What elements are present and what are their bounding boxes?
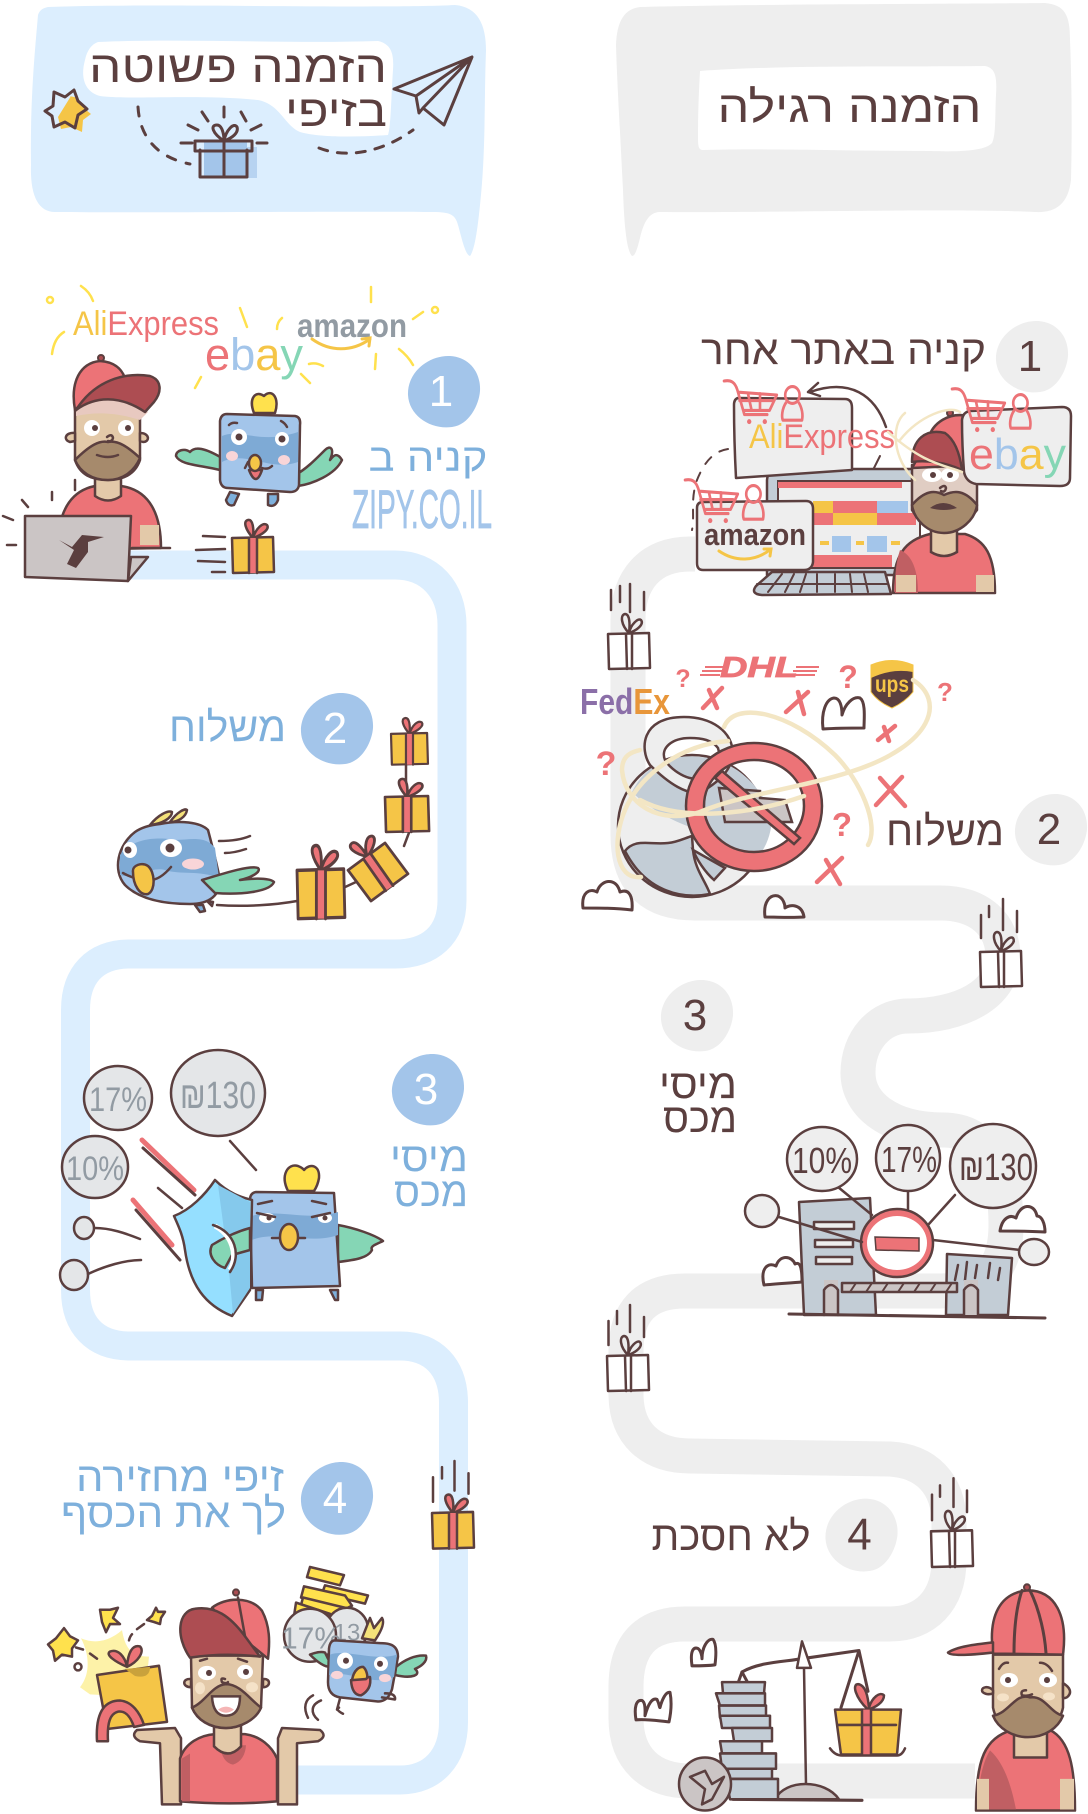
step 1 right: number badge bbox=[996, 321, 1068, 392]
open gift bbox=[97, 1646, 167, 1741]
globe with location pin bbox=[618, 717, 772, 897]
shirt bbox=[180, 1734, 277, 1803]
title: simple order with Zipy bbox=[89, 43, 387, 136]
eBay logo: ebay bbox=[205, 329, 304, 380]
gift falling 2 bbox=[980, 899, 1022, 987]
amazon card bbox=[685, 480, 813, 570]
step 1 left: number badge bbox=[408, 356, 480, 427]
step 1 right: number badge: 1 bbox=[1018, 332, 1042, 381]
crown bbox=[285, 1166, 319, 1191]
bird shielding from taxes bbox=[60, 1050, 383, 1316]
small clouds bbox=[635, 1639, 716, 1722]
buildings bbox=[799, 1198, 1012, 1315]
step 3 right: number badge: 3 bbox=[683, 991, 707, 1040]
question marks bbox=[596, 659, 953, 843]
panel: Zipy speech bubble bbox=[31, 5, 486, 256]
gift falling 1 bbox=[608, 584, 650, 669]
icon: paper plane bbox=[394, 57, 472, 125]
step 4 right: number badge bbox=[825, 1499, 898, 1571]
tax bubbles: ₪130 bbox=[959, 1147, 1033, 1189]
arrow between sites bbox=[692, 383, 886, 530]
step 4 left: label bbox=[61, 1454, 286, 1536]
AliExpress logo: AliExpress bbox=[73, 305, 219, 343]
gift falling 4 bbox=[931, 1478, 973, 1567]
icon: gift with rays bbox=[181, 107, 267, 178]
gold coin stack bbox=[294, 1567, 368, 1624]
step 1 left: number badge: 1 bbox=[429, 367, 453, 416]
step 1 left: label: ZIPY.CO.IL bbox=[352, 478, 492, 540]
tax bubbles bbox=[60, 1050, 265, 1290]
blue winding path bbox=[76, 565, 454, 1780]
keyboard bbox=[754, 572, 891, 595]
dashed flight path bbox=[138, 107, 413, 164]
gift on tray bbox=[830, 1684, 905, 1755]
eBay card bbox=[952, 389, 1071, 486]
step 3 left: number badge: 3 bbox=[414, 1065, 438, 1114]
step 4 right: number badge: 4 bbox=[847, 1510, 872, 1560]
step 2 right: label: משלוח bbox=[886, 808, 1004, 854]
step 3 left: label bbox=[390, 1134, 468, 1215]
hand-drawn clouds bbox=[583, 698, 864, 917]
question marks: ? bbox=[675, 665, 691, 693]
title: regular order: הזמנה רגילה bbox=[718, 83, 982, 132]
man sad with cap bbox=[948, 1584, 1075, 1811]
courier logos bbox=[580, 652, 913, 722]
monitor bbox=[767, 469, 920, 575]
panel: regular order speech bubble bbox=[616, 3, 1072, 256]
amazon card: amazon bbox=[704, 517, 806, 552]
body bbox=[250, 1192, 340, 1288]
happy man with open gift bbox=[48, 1589, 324, 1804]
speeding gift bbox=[196, 520, 274, 573]
courier logos: FedEx bbox=[580, 681, 670, 722]
step 3 right: label bbox=[659, 1061, 737, 1141]
tax bubbles bbox=[745, 1124, 1049, 1265]
coin bbox=[679, 1758, 731, 1811]
bird flying with wings bbox=[176, 393, 342, 506]
speed lines bbox=[219, 836, 250, 853]
no-entry sign bbox=[861, 1209, 933, 1277]
tax bubbles: 10% bbox=[66, 1150, 124, 1188]
arrows hitting shield bbox=[133, 1140, 195, 1260]
arms bbox=[134, 1728, 324, 1804]
tax bubbles: 10% bbox=[792, 1140, 852, 1181]
amazon logo: amazon bbox=[297, 307, 407, 344]
delivery route swirls bbox=[617, 680, 930, 877]
AliExpress card bbox=[724, 381, 895, 478]
coins: 17% bbox=[281, 1622, 341, 1656]
red crosses bbox=[703, 688, 905, 884]
gift train bbox=[297, 718, 429, 919]
tax bubbles: 17% bbox=[881, 1139, 937, 1180]
tax bubbles: ₪130 bbox=[180, 1075, 256, 1117]
step 4 left: number badge bbox=[301, 1462, 373, 1535]
head bbox=[191, 1656, 263, 1728]
courier logos: DHL bbox=[720, 652, 798, 684]
question marks: ? bbox=[937, 677, 953, 707]
step 2 right: number badge: 2 bbox=[1037, 805, 1061, 854]
step 3 left: number badge bbox=[392, 1054, 464, 1125]
illustration: customs checkpoint bbox=[745, 1124, 1049, 1318]
motion lines bbox=[88, 1141, 256, 1274]
step 4 left: label: זיפי מחזירה bbox=[76, 1454, 284, 1500]
man looking confused bbox=[893, 410, 995, 593]
step 4 right: label: לא חסכת bbox=[652, 1513, 810, 1559]
title background bbox=[698, 66, 996, 151]
illustration: balance scale with coins and gift bbox=[635, 1639, 905, 1811]
grey winding path bbox=[626, 554, 1006, 1781]
scale stand bbox=[733, 1641, 868, 1800]
yellow sparkles bbox=[47, 286, 438, 388]
courier logos: ups bbox=[875, 671, 909, 697]
step 2 left: number badge: 2 bbox=[323, 704, 347, 753]
shield bbox=[174, 1180, 252, 1316]
question marks: ? bbox=[596, 745, 616, 783]
icon: star bbox=[45, 90, 91, 132]
clouds bbox=[763, 1206, 1045, 1285]
laptop bbox=[25, 516, 170, 581]
step 3 left: label: מיסי bbox=[390, 1134, 468, 1180]
question marks: ? bbox=[832, 806, 852, 843]
step 2 right: number badge bbox=[1015, 794, 1087, 865]
tax bubbles: 17% bbox=[89, 1081, 147, 1119]
burst of light bbox=[80, 1630, 149, 1697]
step 3 right: label: מיסי bbox=[659, 1061, 737, 1107]
title: simple order with Zipy: בזיפי bbox=[285, 87, 387, 136]
step 1 left: label: קניה ב bbox=[368, 437, 488, 480]
happy bird bbox=[305, 1618, 426, 1720]
step 2 left: label: משלוח bbox=[169, 704, 286, 750]
wing behind bbox=[338, 1225, 383, 1262]
gift falling 3 bbox=[607, 1305, 649, 1391]
step 3 left: label: מכס bbox=[394, 1169, 468, 1215]
step 1 right: label: קניה באתר אחר bbox=[701, 327, 986, 373]
eBay card: ebay bbox=[969, 430, 1066, 479]
question marks: ? bbox=[838, 659, 858, 695]
coin stack bbox=[716, 1682, 778, 1799]
illustration: shopping on many sites bbox=[685, 381, 1071, 595]
barrier bbox=[842, 1283, 957, 1292]
step 3 right: number badge bbox=[661, 980, 733, 1051]
typing motion lines bbox=[3, 480, 75, 545]
connecting string bbox=[217, 765, 410, 906]
step 3 right: label: מכס bbox=[663, 1095, 737, 1141]
step 4 left: label: לך את הכסף bbox=[61, 1490, 286, 1536]
bird pulling gifts bbox=[118, 718, 429, 919]
cap bbox=[212, 1600, 269, 1659]
bird body bbox=[118, 810, 274, 912]
no-entry sign bbox=[686, 743, 822, 871]
gift falling left bbox=[432, 1461, 474, 1549]
stars bbox=[48, 1608, 165, 1661]
ground line bbox=[789, 1314, 1045, 1318]
step 1 left: label bbox=[352, 437, 492, 540]
step 4 left: number badge: 4 bbox=[323, 1474, 347, 1523]
title: simple order with Zipy: הזמנה פשוטה bbox=[89, 43, 387, 92]
coins and happy bird bbox=[281, 1567, 426, 1720]
truck bbox=[719, 788, 792, 822]
man with laptop bbox=[3, 355, 170, 581]
coins bbox=[281, 1608, 368, 1662]
title background blob bbox=[83, 41, 393, 137]
AliExpress card: AliExpress bbox=[749, 418, 895, 456]
confusion swirl bbox=[888, 410, 962, 480]
bird arm bbox=[210, 1228, 250, 1268]
illustration: blocked shipping bbox=[580, 652, 953, 917]
coins: 13 bbox=[334, 1619, 360, 1646]
step 2 left: number badge bbox=[301, 693, 373, 764]
